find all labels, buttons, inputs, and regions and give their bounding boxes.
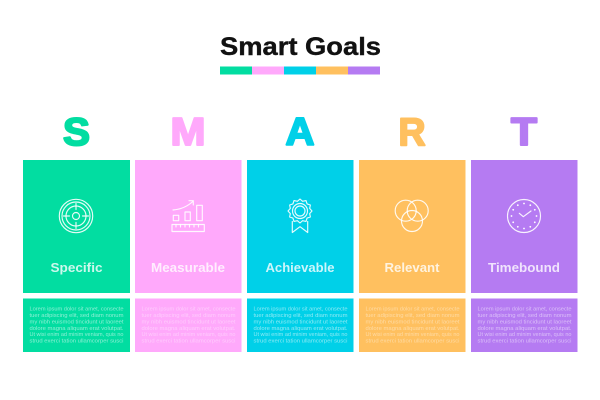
description panel: Measurable: my nibh euismod tincidunt ut laoreet: [142, 319, 236, 325]
description panel: Timebound: my nibh euismod tincidunt ut laoreet: [478, 319, 572, 325]
description panel: Measurable: tuer adipiscing elit, sed diam nonum: [142, 313, 236, 319]
description panel: Relevant: [359, 298, 466, 352]
description panel: Relevant: my nibh euismod tincidunt ut laoreet: [366, 319, 460, 325]
letter A: A: [286, 111, 314, 154]
icon: venn diagram: [395, 200, 428, 232]
description panel: Achievable: Lorem ipsum dolor sit amet, consecte: [254, 306, 348, 312]
icon: clock: [508, 200, 540, 232]
card: Specific: [23, 160, 130, 293]
description panel: Measurable: Lorem ipsum dolor sit amet, consecte: [142, 306, 236, 312]
column: Achievable: [247, 111, 354, 352]
icon: target: [59, 199, 93, 233]
description panel: Specific: [23, 298, 130, 352]
description panel: Relevant: Ut wisi enim ad minim veniam, quis no: [366, 332, 460, 338]
description panel: Achievable: strud exerci tation ullamcorper susci: [254, 339, 348, 345]
column: Measurable: [135, 111, 242, 352]
description panel: Specific: tuer adipiscing elit, sed diam nonum: [30, 313, 124, 319]
letter M: M: [170, 111, 206, 154]
description panel: Relevant: tuer adipiscing elit, sed diam nonum: [366, 313, 460, 319]
column: Relevant: [359, 111, 466, 352]
description panel: Specific: Ut wisi enim ad minim veniam, quis no: [30, 332, 124, 338]
card: Measurable: [135, 160, 242, 293]
card: Relevant: [359, 160, 466, 293]
description panel: Specific: strud exerci tation ullamcorper susci: [30, 339, 124, 345]
description panel: Specific: Lorem ipsum dolor sit amet, consecte: [30, 306, 124, 312]
letter T: T: [511, 111, 537, 154]
description panel: Timebound: Ut wisi enim ad minim veniam, quis no: [478, 332, 572, 338]
column: Specific: [23, 111, 130, 352]
description panel: Measurable: [135, 298, 242, 352]
title: Smart Goals: [220, 33, 381, 61]
description panel: Achievable: dolore magna aliquam erat volutpat.: [254, 326, 348, 332]
label: Measurable: Measurable: [151, 260, 225, 275]
description panel: Measurable: Ut wisi enim ad minim veniam, quis no: [142, 332, 236, 338]
description panel: Achievable: my nibh euismod tincidunt ut laoreet: [254, 319, 348, 325]
description panel: Measurable: dolore magna aliquam erat volutpat.: [142, 326, 236, 332]
label: Relevant: Relevant: [384, 260, 440, 275]
card: Achievable: [247, 160, 354, 293]
letter R: R: [398, 111, 426, 154]
label: Specific: Specific: [50, 260, 102, 275]
description panel: Relevant: Lorem ipsum dolor sit amet, consecte: [366, 306, 460, 312]
label: Achievable: Achievable: [266, 260, 334, 275]
column: Timebound: [471, 111, 578, 352]
description panel: Timebound: [471, 298, 578, 352]
description panel: Specific: my nibh euismod tincidunt ut laoreet: [30, 319, 124, 325]
description panel: Timebound: strud exerci tation ullamcorper susci: [478, 339, 572, 345]
label: Timebound: Timebound: [488, 260, 560, 275]
description panel: Achievable: tuer adipiscing elit, sed diam nonum: [254, 313, 348, 319]
description panel: Timebound: Lorem ipsum dolor sit amet, consecte: [478, 306, 572, 312]
letter S: S: [63, 111, 90, 154]
description panel: Measurable: strud exerci tation ullamcorper susci: [142, 339, 236, 345]
description panel: Timebound: dolore magna aliquam erat volutpat.: [478, 326, 572, 332]
card: Timebound: [471, 160, 578, 293]
description panel: Achievable: Ut wisi enim ad minim veniam, quis no: [254, 332, 348, 338]
description panel: Relevant: strud exerci tation ullamcorper susci: [366, 339, 460, 345]
description panel: Timebound: tuer adipiscing elit, sed diam nonum: [478, 313, 572, 319]
description panel: Specific: dolore magna aliquam erat volutpat.: [30, 326, 124, 332]
description panel: Achievable: [247, 298, 354, 352]
description panel: Relevant: dolore magna aliquam erat volutpat.: [366, 326, 460, 332]
icon: award ribbon: [288, 199, 312, 232]
icon: growth chart with ruler: [172, 201, 204, 232]
title colour bar: [220, 66, 380, 74]
